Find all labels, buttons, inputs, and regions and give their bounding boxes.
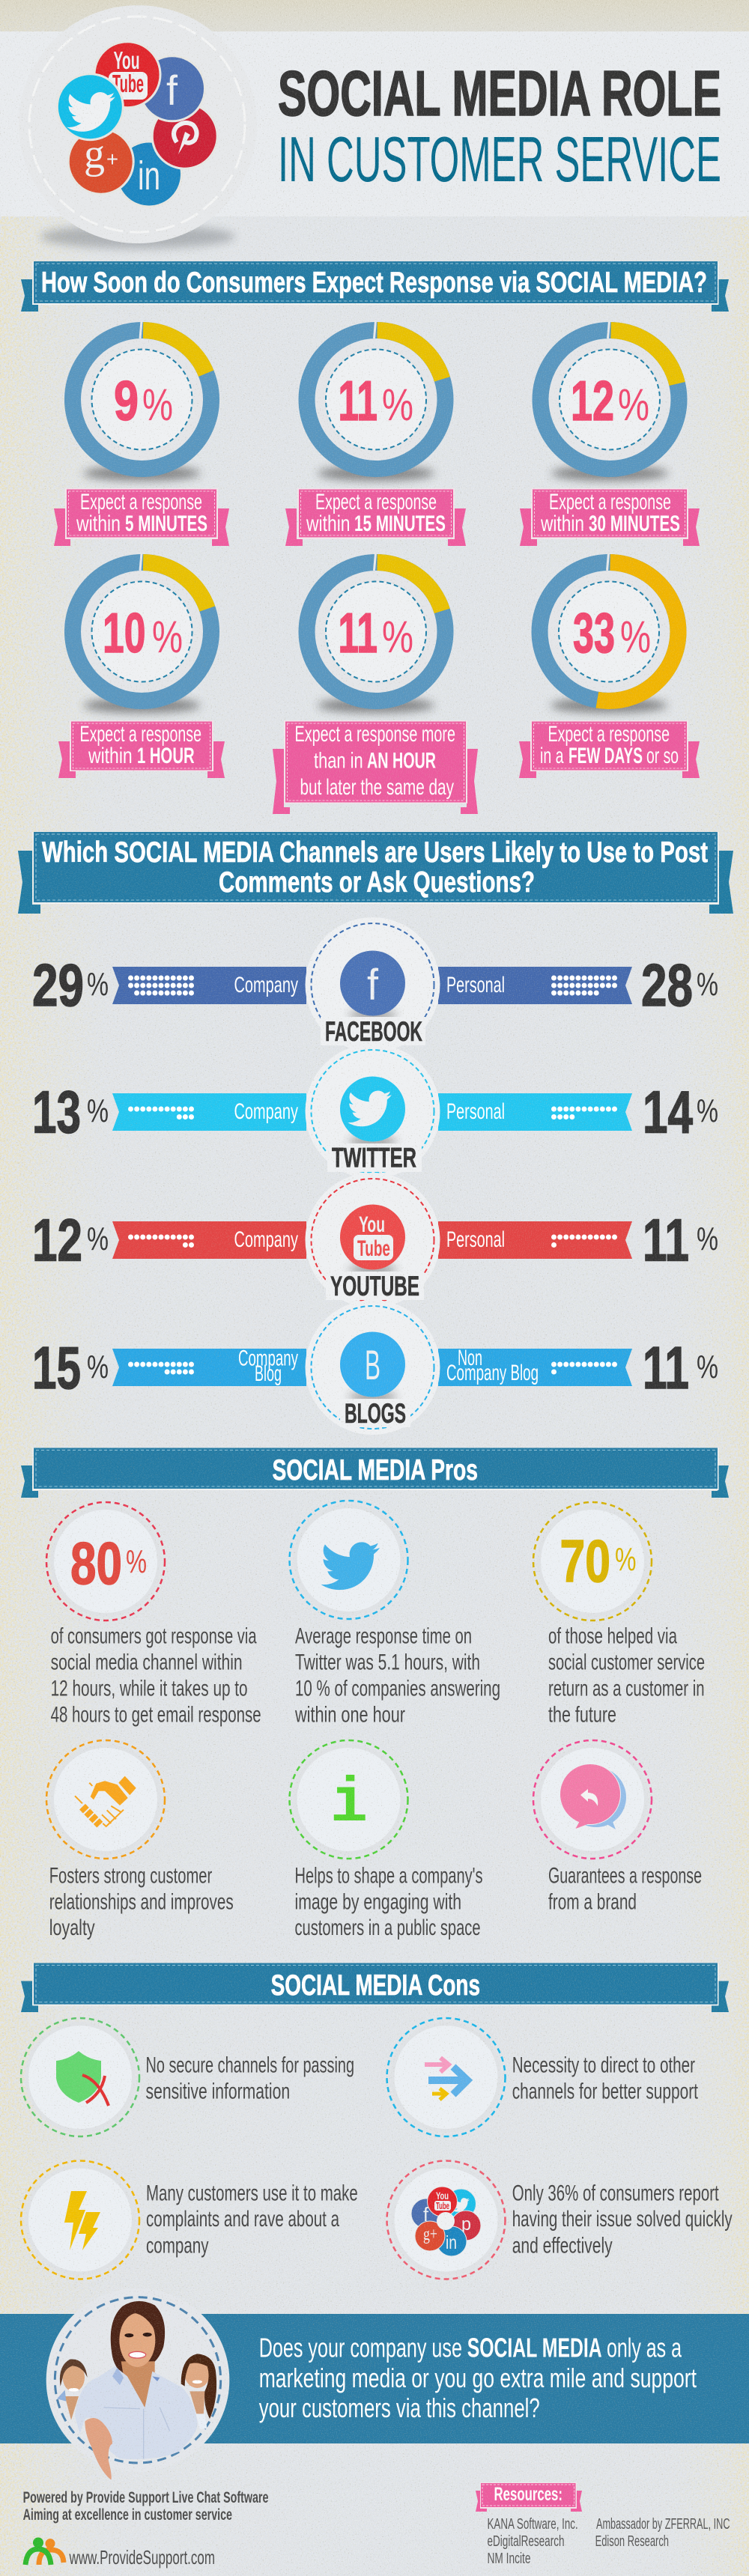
label ribbon: 15 MINUTES	[354, 511, 446, 536]
panel: pro company image	[289, 1740, 482, 1940]
text block: Many customers use it to make	[146, 2181, 358, 2206]
panel: pro guarantees response	[533, 1740, 702, 1914]
text block: image by engaging with	[295, 1890, 461, 1914]
icon: twitter	[57, 74, 123, 140]
panel: pro twitter response time	[289, 1501, 500, 1727]
right bar: non company blog 11%: Non	[458, 1346, 482, 1370]
icon: google plus	[68, 129, 133, 194]
text block: sensitive information	[145, 2079, 290, 2104]
icon: social cluster: g+	[423, 2225, 437, 2244]
text block: 48 hours to get email response	[51, 1703, 261, 1727]
icon: info: i	[330, 1769, 368, 1840]
text block	[146, 2181, 358, 2258]
text block: within one hour	[294, 1703, 405, 1727]
left bar: company blog 15%: 15	[32, 1334, 81, 1401]
label ribbon: but later the same day	[300, 775, 454, 800]
text block	[49, 1864, 234, 1940]
icon: speech bubbles	[560, 1764, 626, 1829]
label ribbon: 5 MINUTES	[125, 511, 207, 536]
panel: pro 80%	[46, 1502, 261, 1727]
left bar: company 29%: Company	[234, 973, 298, 997]
icon: social cluster: p	[461, 2214, 471, 2235]
portrait circle with three women	[46, 2288, 229, 2480]
left bar: company blog 15%: Blog	[255, 1361, 282, 1386]
icon: social cluster: f	[423, 2203, 429, 2226]
panel: donut 11% within 15 minutes: %	[382, 380, 413, 430]
text block: Twitter was 5.1 hours, with	[295, 1650, 480, 1674]
footer: powered by: Aiming at excellence in customer service	[23, 2506, 232, 2524]
text block: the future	[548, 1703, 616, 1727]
label ribbon: within	[76, 511, 121, 536]
heading ribbon: cons: SOCIAL MEDIA Cons	[271, 1969, 480, 2002]
text block	[294, 1624, 500, 1727]
icon: linkedin	[117, 142, 181, 207]
panel: donut 11% more than an hour: %	[382, 612, 413, 662]
text block	[512, 2053, 698, 2104]
label ribbon: than in	[314, 749, 363, 773]
panel: donut 9% within 5 minutes	[54, 321, 229, 546]
panel: youtube row	[32, 1173, 718, 1307]
label ribbon: Expect a response	[549, 490, 671, 514]
text block: from a brand	[548, 1890, 637, 1914]
panel: con no secure channels	[21, 2018, 354, 2136]
label ribbon: 1 HOUR	[137, 744, 195, 768]
panel: donut 33% in a few days: 33	[573, 601, 615, 664]
text block: company	[146, 2234, 208, 2258]
panel: pro customer relationships	[46, 1740, 234, 1940]
panel: donut 33% in a few days	[519, 553, 700, 778]
title	[278, 58, 721, 195]
panel: pro 70%: 70	[560, 1528, 610, 1594]
left bar: company 13%: 13	[32, 1078, 81, 1146]
youtube badge	[306, 1173, 440, 1307]
right bar: personal 14%: 14	[643, 1078, 693, 1146]
facebook badge	[306, 917, 440, 1052]
text block: of those helped via	[548, 1624, 677, 1649]
heading ribbon: which channels: Comments or Ask Questions?	[219, 866, 535, 899]
icon: youtube	[94, 42, 160, 108]
panel: con only 36%	[386, 2161, 733, 2279]
label ribbon: within	[540, 511, 584, 536]
footer: powered by: Powered by Provide Support Live Chat Software	[23, 2489, 268, 2506]
panel: donut 11% more than an hour	[273, 553, 478, 814]
text block: Fosters strong customer	[49, 1864, 212, 1889]
left bar: company 12%: Company	[234, 1227, 298, 1252]
blogs badge: B	[365, 1341, 380, 1388]
label ribbon: 30 MINUTES	[589, 511, 680, 536]
label ribbon: within	[306, 511, 351, 536]
right bar: personal 28%: %	[697, 966, 718, 1003]
icon: facebook: f	[166, 67, 178, 114]
left bar: company blog 15%	[32, 1334, 306, 1401]
left bar: company 13%: %	[87, 1093, 109, 1129]
resources list: KANA Software, Inc.	[487, 2516, 578, 2533]
right bar: personal 28%: 28	[641, 952, 693, 1018]
icon: google plus: +	[106, 148, 118, 171]
main woman	[75, 2301, 198, 2480]
icon: social cluster: Tube	[436, 2200, 449, 2211]
text block	[295, 1864, 482, 1940]
label ribbon	[519, 720, 700, 778]
label ribbon	[273, 720, 478, 814]
icon: handshake	[75, 1776, 136, 1826]
panel: pro 80%: 80	[70, 1530, 122, 1597]
text block	[548, 1624, 705, 1727]
youtube badge: YOUTUBE	[330, 1271, 419, 1301]
call to action text: your customers via this channel?	[259, 2393, 540, 2423]
text block: 10 % of companies answering	[295, 1676, 500, 1701]
label ribbon: Expect a response	[79, 722, 201, 747]
right bar: personal 14%: Personal	[446, 1099, 505, 1124]
panel: donut 10% within 1 hour	[58, 553, 225, 778]
resources list: NM Incite	[487, 2551, 530, 2567]
panel: con complaints	[21, 2161, 358, 2279]
label ribbon: FEW DAYS	[568, 744, 643, 768]
youtube badge: Tube	[357, 1236, 390, 1261]
text block: of consumers got response via	[51, 1624, 257, 1649]
label ribbon: Expect a response	[315, 490, 437, 514]
panel: pro 80%: %	[126, 1543, 147, 1580]
text block: relationships and improves	[49, 1890, 234, 1914]
panel: donut 12% within 30 minutes	[520, 321, 700, 546]
right bar: non company blog 11%: %	[697, 1349, 718, 1385]
resources ribbon: Resources:	[494, 2484, 562, 2505]
text block: No secure channels for passing	[145, 2053, 354, 2078]
icon: google plus: g	[84, 131, 105, 177]
heading ribbon: how soon	[21, 261, 729, 312]
text block: loyalty	[49, 1916, 95, 1940]
text block: Average response time on	[295, 1624, 472, 1649]
panel: donut 12% within 30 minutes: %	[618, 380, 649, 430]
label ribbon: Expect a response	[548, 722, 670, 747]
right bar: non company blog 11%: Company Blog	[446, 1361, 539, 1385]
label ribbon: Expect a response more	[295, 722, 455, 747]
call to action band	[0, 2314, 749, 2443]
facebook badge: f	[367, 961, 379, 1009]
icon: youtube: You	[114, 46, 139, 74]
heading ribbon: pros: SOCIAL MEDIA Pros	[273, 1454, 478, 1486]
twitter badge	[306, 1044, 440, 1179]
text block: complaints and rave about a	[146, 2207, 339, 2232]
text block	[512, 2181, 733, 2258]
footer: provide support logo	[25, 2537, 215, 2569]
icon: linkedin: in	[138, 154, 160, 198]
resources list: Edison Research	[595, 2533, 669, 2550]
label ribbon: or so	[646, 744, 679, 768]
youtube badge: You	[359, 1212, 385, 1237]
panel: donut 33% in a few days: %	[620, 612, 651, 662]
panel: donut 11% within 15 minutes: 11	[339, 369, 377, 432]
text block	[51, 1624, 261, 1727]
icon: social cluster: You	[436, 2190, 449, 2202]
right bar: personal 11%: Personal	[446, 1227, 505, 1252]
label ribbon: AN HOUR	[367, 749, 436, 773]
resources list	[487, 2516, 730, 2567]
call to action text: SOCIAL MEDIA	[467, 2332, 602, 2363]
right woman	[181, 2354, 216, 2428]
text block: and effectively	[512, 2234, 613, 2258]
call to action text: Does your company use	[259, 2332, 462, 2363]
icon: pinterest	[152, 103, 217, 168]
left bar: company 29%	[32, 952, 306, 1018]
panel: donut 11% within 15 minutes	[285, 321, 466, 546]
text block	[548, 1864, 702, 1914]
footer: provide support logo: www.ProvideSupport.com	[69, 2546, 215, 2569]
left bar: company blog 15%: Company	[238, 1346, 298, 1370]
left bar: company 29%: %	[87, 966, 109, 1003]
text block: 12 hours, while it takes up to	[51, 1676, 248, 1701]
resources list: eDigitalResearch	[487, 2533, 565, 2550]
facebook badge: FACEBOOK	[325, 1016, 422, 1047]
text block: Helps to shape a company's	[295, 1864, 482, 1889]
text block: customers in a public space	[295, 1916, 481, 1940]
heading ribbon: which channels	[18, 832, 733, 914]
panel: donut 9% within 5 minutes: %	[142, 380, 173, 430]
title logo circle with social icons	[19, 5, 257, 249]
left bar: company 12%: %	[87, 1221, 109, 1257]
label ribbon	[285, 488, 466, 546]
icon: twitter bird	[321, 1542, 380, 1590]
icon: social cluster	[411, 2187, 481, 2256]
right bar: non company blog 11%: 11	[643, 1334, 689, 1401]
right bar: personal 11%: 11	[643, 1207, 689, 1273]
footer: powered by	[23, 2489, 268, 2524]
panel: pro 70%: %	[615, 1541, 637, 1578]
left bar: company 12%: 12	[32, 1207, 82, 1273]
left bar: company 12%	[32, 1207, 306, 1273]
icon: youtube: Tube	[112, 70, 144, 97]
label ribbon: Expect a response	[80, 490, 202, 514]
left bar: company 13%	[32, 1078, 306, 1146]
panel: donut 11% more than an hour: 11	[339, 601, 377, 664]
icon: lightning	[64, 2191, 100, 2250]
right bar: personal 14%	[438, 1078, 718, 1146]
icon: facebook	[139, 56, 205, 121]
label ribbon	[58, 720, 225, 778]
text block: social media channel within	[51, 1650, 243, 1674]
right bar: personal 11%	[438, 1207, 718, 1273]
call to action text	[259, 2332, 697, 2423]
label ribbon: in a	[540, 744, 564, 768]
blogs badge	[306, 1300, 440, 1435]
right bar: personal 11%: %	[697, 1221, 718, 1257]
call to action text: only as a	[607, 2332, 682, 2363]
left bar: company blog 15%: %	[87, 1349, 109, 1385]
panel: donut 12% within 30 minutes: 12	[571, 369, 614, 432]
left bar: company 29%: 29	[32, 952, 84, 1018]
heading ribbon: cons	[21, 1963, 729, 2012]
right bar: non company blog 11%	[438, 1334, 718, 1401]
left bar: company 13%: Company	[234, 1099, 298, 1124]
label ribbon	[54, 488, 229, 546]
right bar: personal 14%: %	[697, 1093, 718, 1129]
resources ribbon	[476, 2482, 582, 2512]
blogs badge: BLOGS	[345, 1398, 406, 1429]
panel: twitter row	[32, 1044, 718, 1179]
icon: shield	[56, 2051, 109, 2106]
label ribbon: within	[88, 744, 133, 768]
icon: social cluster: in	[446, 2232, 457, 2253]
panel: facebook row	[32, 917, 718, 1052]
heading ribbon: pros	[21, 1448, 729, 1498]
panel: donut 10% within 1 hour: 10	[103, 601, 145, 664]
label ribbon	[520, 488, 700, 546]
right bar: personal 28%	[438, 952, 718, 1018]
panel: donut 9% within 5 minutes: 9	[114, 369, 139, 432]
twitter badge: TWITTER	[332, 1143, 416, 1173]
icon: arrows	[425, 2058, 467, 2100]
left woman	[57, 2359, 88, 2420]
panel: pro 70%	[533, 1502, 705, 1727]
panel: blogs row	[32, 1300, 718, 1435]
text block	[145, 2053, 354, 2104]
panel: con necessity to direct	[386, 2018, 698, 2136]
right bar: personal 28%: Personal	[446, 973, 505, 997]
panel: donut 10% within 1 hour: %	[152, 612, 183, 662]
